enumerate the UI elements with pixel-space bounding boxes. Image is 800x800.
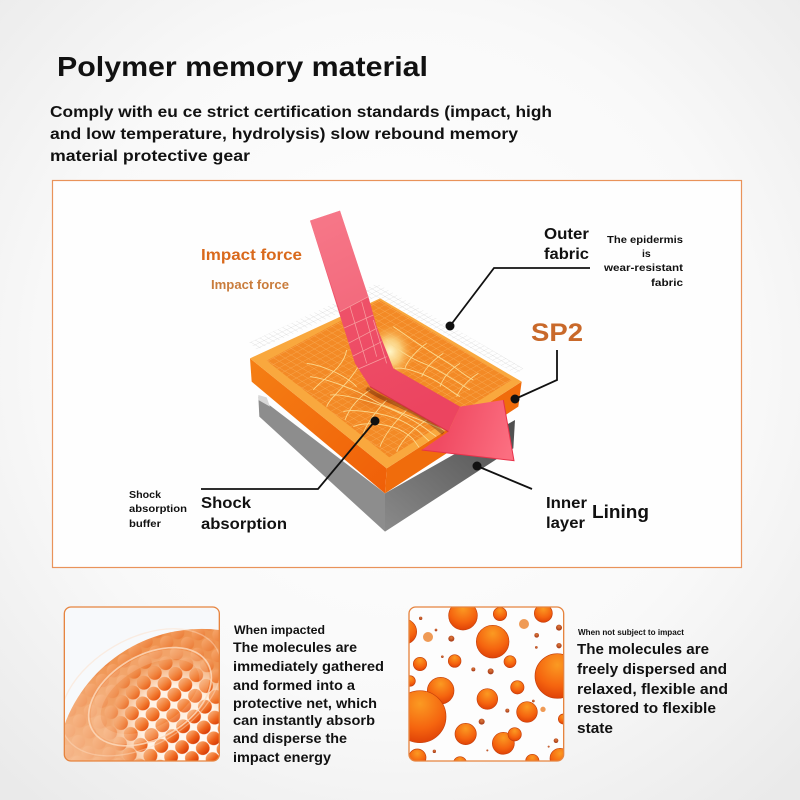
force arrow [310,211,514,461]
epidermis note: The epidermis [607,234,683,246]
shock absorption label: absorption [201,516,287,533]
inner layer grey block [258,395,515,532]
image: molecules when not impacted [408,606,564,762]
intro text block: Comply with eu ce strict certification standards (impact, high [50,104,552,121]
intro text block [50,104,552,165]
text: when not subject to impact: The molecules are [577,642,709,658]
shock absorption buffer note: Shock [129,490,161,501]
lining label: Lining [592,502,649,522]
text: when impacted: and disperse the [233,730,347,746]
text: when not subject to impact: state [577,721,613,737]
inner layer label: layer [546,515,585,532]
inner layer label [546,495,587,532]
text: when impacted: protective net, which [233,695,377,711]
shock absorption buffer note: absorption [129,504,187,515]
illustration: material layers and force arrow [249,211,523,532]
shock absorption label [201,495,287,533]
leader line: SP2 [510,350,557,404]
impact force heading: Impact force [201,247,302,264]
text: when impacted: When impacted [234,625,325,637]
impact force sub-label: Impact force [211,278,289,292]
shock absorption buffer note [129,490,187,530]
outer fabric mesh [249,283,523,374]
outer fabric label: fabric [544,246,589,263]
text: when not subject to impact: freely dispersed and [577,662,727,678]
text: when impacted: immediately gathered [233,658,384,674]
text: when not subject to impact: restored to flexible [577,701,716,717]
outer fabric label [544,226,589,263]
text: when not subject to impact: relaxed, flexible and [577,682,728,698]
text: when impacted: and formed into a [233,677,355,693]
text: when impacted: The molecules are [233,639,357,655]
text: when not subject to impact: When not subject to impact [578,627,684,637]
text: when not subject to impact [577,627,728,737]
panel: layered structure diagram [52,180,742,568]
inner layer label: Inner [546,495,587,512]
shock absorption buffer note: buffer [129,519,161,530]
text: when impacted: can instantly absorb [233,712,375,728]
epidermis note: wear-resistant [603,262,684,274]
SP2 label: SP2 [531,319,583,347]
intro text block: and low temperature, hydrolysis) slow rebound memory [50,126,518,143]
leader line: shock absorption [201,416,380,489]
text: when impacted: impact energy [233,749,331,765]
text: when impacted [233,625,384,765]
outer fabric label: Outer [544,226,589,243]
leader line: outer fabric [446,268,590,330]
SP2 orange foam layer [250,298,522,493]
epidermis note [603,234,684,289]
epidermis note: is [642,248,651,260]
epidermis note: fabric [651,277,683,289]
image: molecules when impacted [64,606,220,762]
title: Polymer memory material [57,51,428,82]
shock absorption label: Shock [201,495,251,512]
intro text block: material protective gear [50,148,250,165]
leader line: inner layer [472,462,532,489]
